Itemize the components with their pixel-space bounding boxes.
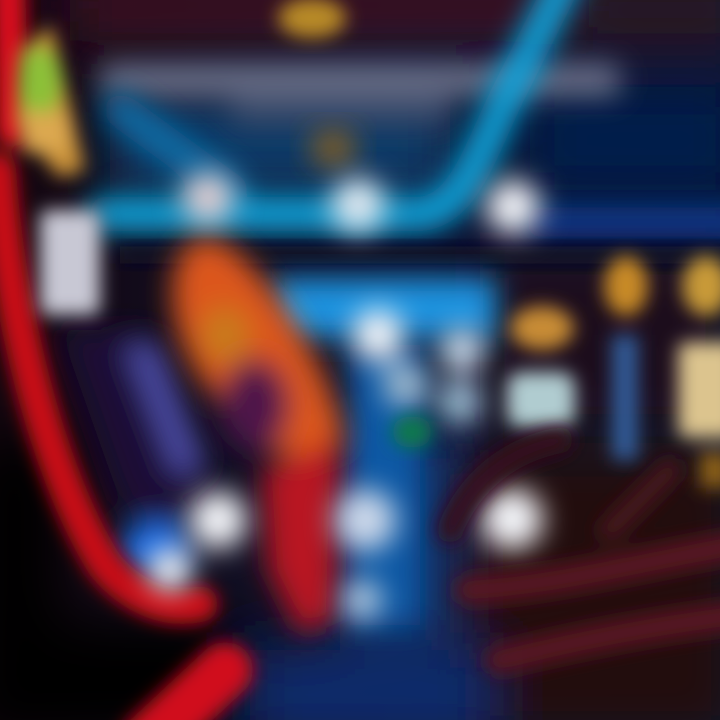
dark strip below neon band [120, 246, 720, 264]
orange figure [172, 238, 345, 635]
right slot machines [507, 256, 720, 488]
ceiling amber light [278, 0, 346, 38]
machine dark interior with purple and blue screen [60, 330, 210, 574]
green light [392, 416, 432, 448]
neon blue band [105, 0, 720, 222]
small amber light [309, 128, 357, 168]
foreground seats [450, 440, 720, 660]
blue lower column [350, 345, 420, 625]
blue screen [272, 278, 496, 338]
white lights row [148, 172, 543, 620]
ceiling sign band [100, 64, 620, 124]
red machine edge [0, 0, 225, 720]
machine top colored panel [15, 25, 85, 178]
machine white screen [40, 210, 100, 315]
